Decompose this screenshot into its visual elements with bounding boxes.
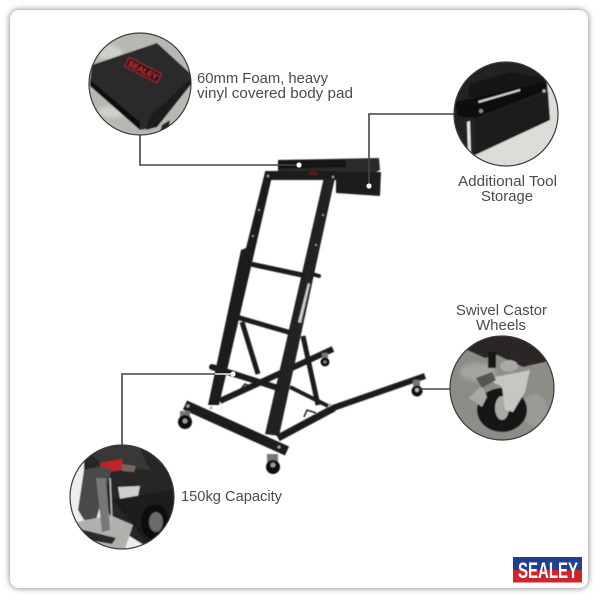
tool storage bracket (336, 172, 381, 196)
callout image: castor wheels (448, 330, 556, 442)
callout text: tool storage: Storage (481, 189, 533, 205)
rungs (212, 263, 319, 388)
castor: far right (412, 380, 422, 396)
castor: front right (266, 454, 280, 474)
right rail (265, 173, 336, 436)
leader line: body pad (140, 134, 302, 168)
body pad (278, 158, 380, 172)
callout image: tool storage (450, 60, 562, 170)
callout text: body pad: vinyl covered body pad (197, 86, 353, 102)
base bars (185, 376, 425, 451)
castor: front left (178, 411, 192, 429)
left rail (208, 172, 273, 405)
pad logo: SEALEY (126, 59, 160, 82)
callout image: lifted vehicle (68, 443, 176, 551)
callout text: body pad: 60mm Foam, heavy (197, 71, 329, 87)
callout text: castor wheels: Swivel Castor (456, 303, 547, 319)
product: folding body positioner frame (178, 158, 425, 474)
rear legs and struts (220, 322, 333, 417)
callout text: castor wheels: Wheels (476, 318, 526, 334)
leader line: tool storage (366, 114, 455, 189)
callout text: castor wheels (456, 303, 547, 334)
callout text: tool storage: Additional Tool (458, 174, 557, 190)
callout text: tool storage (458, 174, 557, 205)
callout image: body pad (88, 32, 192, 136)
leader line: castor wheels (420, 388, 451, 390)
castor: rear (320, 353, 330, 366)
warning label (298, 283, 310, 323)
top bar (265, 171, 337, 180)
bolts (186, 175, 334, 449)
callout text: capacity: 150kg Capacity (181, 489, 283, 505)
callout text: body pad (197, 71, 353, 102)
leader line: capacity (122, 371, 236, 446)
